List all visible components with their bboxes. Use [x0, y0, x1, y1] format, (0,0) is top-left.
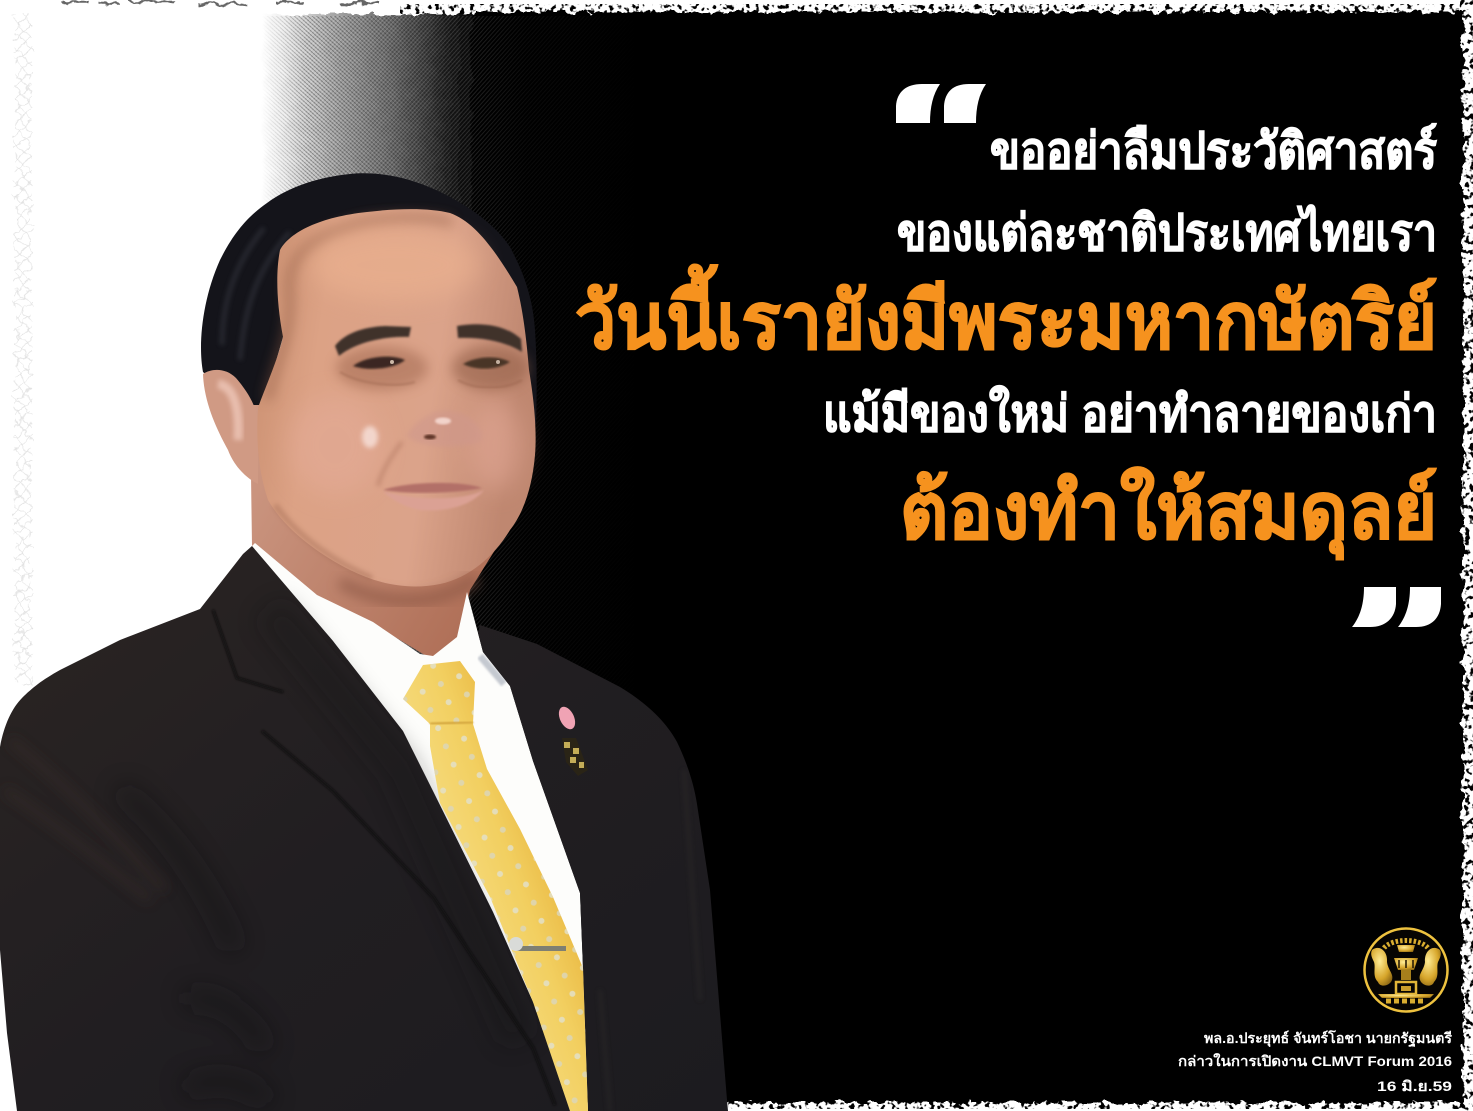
- icon: government seal: [1364, 928, 1448, 1012]
- face: [257, 209, 536, 586]
- lower lapel line: [262, 731, 555, 1105]
- hair highlights: [222, 228, 290, 360]
- tie clip: [509, 937, 566, 951]
- cheek highlight: [362, 426, 378, 448]
- neck: [250, 405, 505, 660]
- ear highlight: [218, 384, 238, 440]
- crosshatch texture on fade: [266, 16, 555, 654]
- left eye socket: [336, 346, 428, 390]
- opening quote marks: [896, 84, 986, 123]
- jaw fold: [275, 505, 372, 578]
- event: กล่าวในการเปิดงาน CLMVT Forum 2016: [1178, 1052, 1452, 1069]
- portrait: man in dark suit and yellow tie: [0, 173, 728, 1111]
- nose: [407, 411, 482, 447]
- mottled right edge: [1460, 0, 1473, 1111]
- line 5 highlighted: ต้องทำให้สมดุลย์: [900, 466, 1437, 560]
- left eyebrow: [335, 326, 411, 356]
- mottled top edge: [400, 4, 1473, 14]
- quote text: [575, 123, 1437, 560]
- sleeve highlights: [5, 740, 165, 900]
- under chin shadow: [340, 578, 476, 600]
- nasolabial fold: [378, 442, 402, 486]
- closing quote marks: [1352, 587, 1441, 627]
- right sleeve seam: [600, 770, 700, 1111]
- left under-eye crease: [340, 372, 415, 385]
- speaker: พล.อ.ประยุทธ์ จันทร์โอชา นายกรัฐมนตรี: [1204, 1029, 1452, 1048]
- ear: [203, 370, 258, 484]
- black torn-edge panel: [262, 12, 1463, 1102]
- right eye glint: [496, 360, 500, 364]
- nose highlight: [435, 418, 451, 424]
- lapel medal: [562, 738, 588, 776]
- left cheek light: [289, 395, 381, 495]
- hairline shadow: [268, 218, 452, 400]
- right eyebrow: [457, 324, 522, 352]
- suit: [0, 546, 728, 1111]
- left eye: [353, 357, 405, 369]
- left eye glint: [390, 360, 394, 364]
- shirt collar shadow: [480, 656, 504, 684]
- nostril: [424, 434, 436, 440]
- line 3 highlighted: วันนี้เรายังมีพระมหากษัตริย์: [575, 264, 1437, 365]
- lapel shadow: [270, 610, 520, 1040]
- date: 16 มิ.ย.59: [1377, 1078, 1452, 1094]
- upper lapel line: [213, 610, 283, 692]
- mottled bottom edge: [728, 1096, 1473, 1109]
- attribution: [1178, 1029, 1452, 1094]
- lapel pin: [556, 704, 578, 732]
- tie: [403, 661, 588, 1111]
- mouth: [383, 483, 484, 510]
- right eye socket: [452, 346, 528, 390]
- sleeve shadows: [120, 790, 270, 1100]
- shirt: [252, 543, 588, 1111]
- right cheek: [469, 400, 521, 490]
- left margin scratches: [14, 14, 32, 684]
- top scratches: [60, 2, 380, 4]
- right eye: [463, 357, 510, 369]
- forehead light: [310, 229, 480, 301]
- hair: [201, 173, 537, 425]
- right under-eye crease: [458, 380, 522, 388]
